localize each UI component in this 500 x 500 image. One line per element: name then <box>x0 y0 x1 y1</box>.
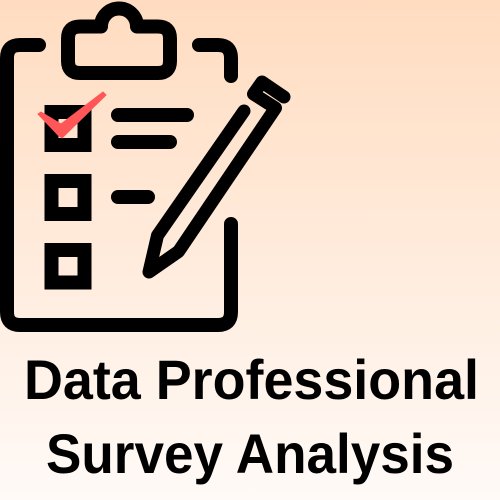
icon: pencil <box>149 82 284 272</box>
clipboard board outline <box>7 45 231 325</box>
clipboard clip <box>68 8 170 73</box>
text line 2 <box>118 135 170 149</box>
icon: clipboard checklist <box>7 8 284 325</box>
checkbox 2 <box>52 181 84 214</box>
text line 3 <box>118 190 148 204</box>
title <box>24 348 479 485</box>
icon: red check mark <box>38 92 106 138</box>
checkbox 1 <box>52 112 84 145</box>
checkbox 3 <box>52 250 84 282</box>
title line 2: Survey Analysis <box>46 422 454 485</box>
title line 1: Data Professional <box>24 348 479 411</box>
text line 1 <box>118 108 187 122</box>
